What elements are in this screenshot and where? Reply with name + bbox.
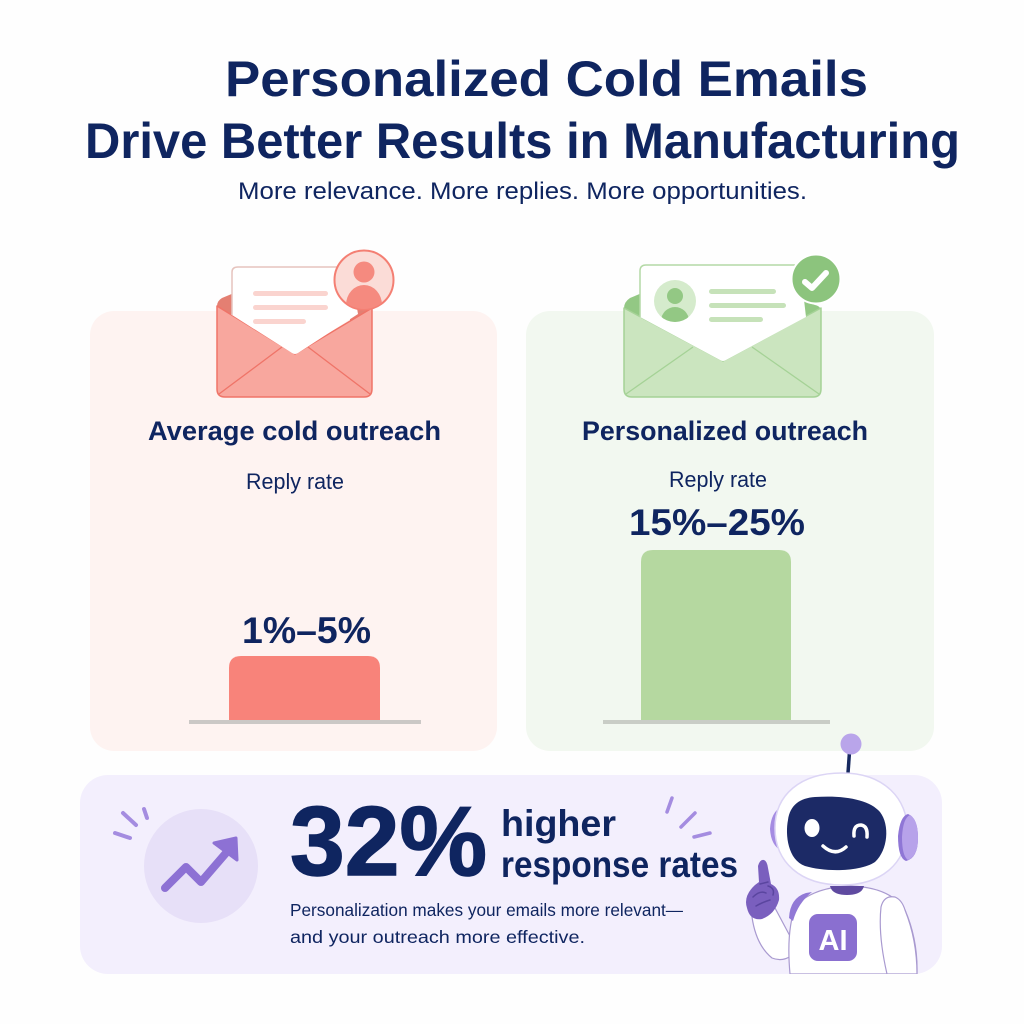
panel: 32% callout	[80, 734, 942, 974]
bar: 1%–5%	[229, 656, 380, 721]
icon: AI robot: AI	[818, 925, 848, 957]
icon: AI robot	[746, 734, 918, 974]
value: 15%–25%: 15%–25%	[629, 502, 805, 543]
icon: red envelope with avatar	[217, 250, 394, 397]
label: reply rate: Reply rate	[246, 469, 344, 494]
description	[290, 900, 683, 947]
subtitle: More relevance. More replies. More opportunities.	[238, 178, 807, 205]
value: 1%–5%: 1%–5%	[242, 610, 371, 651]
heading: average cold outreach: Average cold outreach	[148, 416, 441, 446]
panel: personalized outreach	[526, 254, 934, 751]
bar: 15%–25%	[641, 550, 791, 721]
icon: green envelope with check	[624, 254, 840, 397]
title	[85, 51, 960, 169]
title: Personalized Cold Emails	[225, 51, 868, 107]
statistic label: higher	[501, 803, 616, 844]
label: reply rate: Reply rate	[669, 467, 767, 492]
icon: rising arrow	[115, 809, 258, 923]
description: Personalization makes your emails more relevant—	[290, 900, 683, 920]
panel: average cold outreach	[90, 250, 497, 751]
heading: personalized outreach: Personalized outreach	[582, 416, 868, 446]
statistic: 32%: 32%	[290, 786, 487, 896]
sparkle lines	[667, 798, 710, 837]
statistic label: response rates	[501, 844, 738, 885]
description: and your outreach more effective.	[290, 927, 585, 947]
title: Drive Better Results in Manufacturing	[85, 113, 960, 169]
statistic label	[501, 803, 738, 885]
